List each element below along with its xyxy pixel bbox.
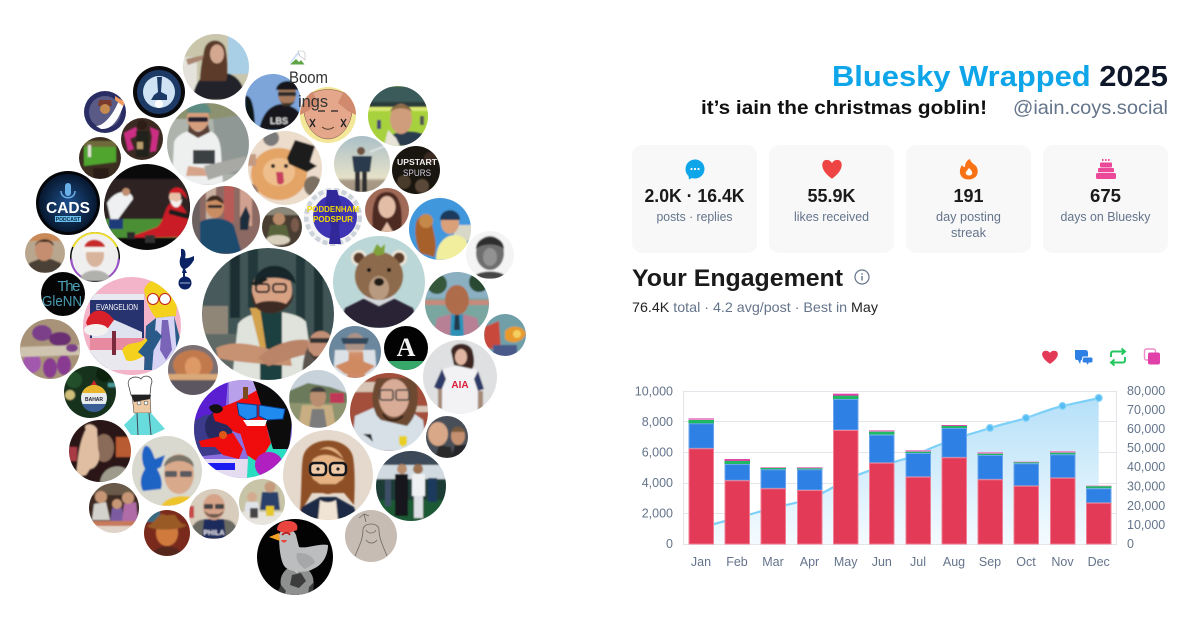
avatar: woman with long dark hair [365, 188, 409, 232]
stat label: likes received [794, 210, 869, 224]
avatar: fisherman [167, 103, 249, 185]
right axis labels: 10,000 [1127, 518, 1165, 532]
icon: heart [822, 160, 842, 179]
month labels: Jun [872, 555, 892, 569]
avatar: hand on face [69, 420, 131, 482]
chart gridlines [683, 391, 1117, 544]
avatar: broken image placeholder with alt text: Boom [289, 69, 328, 87]
avatar: santa hat selfie [70, 232, 120, 282]
bars: pink quotes segments [688, 394, 1112, 487]
avatar: man in cowboy hat [144, 510, 190, 556]
avatar: main large photo of man with cap and beard [202, 248, 334, 380]
right axis labels: 80,000 [1127, 384, 1165, 398]
avatar: bauble ornament: BAHAR [85, 397, 103, 403]
avatar: Poddenham Podspur: PODSPUR [313, 215, 353, 224]
avatar: Upstart Spurs: UPSTART [397, 158, 437, 167]
right axis labels: 20,000 [1127, 499, 1165, 513]
avatar: pomeranian in top hat [248, 131, 322, 205]
heading: Your Engagement: Your Engagement [632, 265, 843, 292]
avatar: Upstart Spurs: SPURS [403, 168, 431, 178]
left axis labels [635, 384, 673, 551]
avatar: Simpsons Evangelion: EVANGELION [96, 303, 138, 312]
avatar: bald man in Philly vest: PHILA [204, 530, 224, 537]
avatar: club badge [133, 66, 185, 118]
avatar: CADS podcast: PODCAST [56, 217, 80, 223]
right axis labels: 40,000 [1127, 460, 1165, 474]
avatar: The Glenn [41, 272, 85, 316]
right axis labels: 50,000 [1127, 441, 1165, 455]
stat value: 55.9K [808, 185, 856, 206]
avatar: pink jacket [121, 118, 163, 160]
avatar: chicken on football [225, 487, 365, 627]
avatar: Upstart Spurs [392, 146, 440, 194]
avatar: black and white portrait [466, 231, 514, 279]
avatar: man holding dog [409, 198, 471, 260]
cumulative line [701, 398, 1099, 528]
stat label: days on Bluesky [1060, 210, 1151, 224]
avatar: broken image placeholder with alt text: ings [298, 93, 328, 111]
month labels: Dec [1088, 555, 1110, 569]
left axis labels: 4,000 [642, 476, 673, 490]
avatar: letter A badge: A [397, 333, 416, 362]
avatar: woman with dark hair [183, 34, 249, 100]
icon: legend reposts arrows [1111, 348, 1125, 366]
avatar: Poddenham Podspur: PODDENHAM [307, 205, 359, 214]
avatar: woman in Ferrari shirt [319, 342, 459, 482]
avatar: colourful mural [484, 314, 526, 356]
avatar: letter A badge [336, 278, 476, 418]
right axis labels: 60,000 [1127, 422, 1165, 436]
stat label: posts · replies [656, 210, 732, 224]
avatar: two men selfie [377, 367, 517, 507]
left axis labels: 8,000 [642, 415, 673, 429]
avatar: man in stadium [368, 86, 428, 146]
month labels: Oct [1016, 555, 1036, 569]
icon: chat bubble [686, 159, 704, 180]
avatar: The Glenn: GleNN [42, 293, 82, 310]
panel: posting streak stat [906, 145, 1031, 253]
avatar: painted portrait [192, 186, 260, 254]
left axis labels: 2,000 [642, 506, 673, 520]
avatar: santa on the pitch [104, 164, 190, 250]
avatar: man with blue cockerel [132, 436, 202, 506]
month labels: Aug [943, 555, 965, 569]
month labels: Mar [762, 555, 784, 569]
month labels: Sep [979, 555, 1001, 569]
right axis labels: 0 [1127, 537, 1134, 551]
avatar: man with food at table [262, 207, 302, 247]
stat label second line: streak [951, 226, 987, 240]
icon: Tottenham cockerel crest [178, 249, 194, 290]
avatar: players in stadium [341, 416, 481, 556]
stat value: 191 [954, 185, 984, 206]
avatar: bear in sweater [333, 236, 425, 328]
subtitle: display name: it’s iain the christmas goblin! [701, 97, 987, 119]
avatar: cartoon chef [124, 376, 165, 435]
bars: blue replies segments [689, 400, 1111, 503]
icon: legend likes heart [1042, 351, 1058, 364]
stat label: day posting [936, 210, 1001, 224]
avatar: CADS podcast: CADS [46, 200, 90, 217]
bars: green reposts segments [688, 396, 1112, 488]
cumulative line points [914, 394, 1102, 458]
chart legend icons [1042, 348, 1160, 366]
month labels: Jan [691, 555, 711, 569]
panel: posts and replies stat [632, 145, 757, 253]
engagement summary text: 76.4K total · 4.2 avg/post · Best in May [632, 299, 878, 315]
avatar: Poddenham Podspur [304, 188, 362, 246]
avatar: pencil sketch [301, 466, 441, 606]
avatar: broken image placeholder with alt text [289, 51, 328, 111]
combined bar and line chart [635, 384, 1165, 569]
panel: days on Bluesky stat [1043, 145, 1168, 253]
avatar: family with merchandise [239, 479, 285, 525]
stat value: 2.0K · 16.4K [644, 185, 745, 206]
month labels: Feb [726, 555, 748, 569]
panel: likes stat [769, 145, 894, 253]
avatar: cartoon red dog with sunglasses [194, 380, 292, 478]
icon: legend replies bubbles [1075, 350, 1093, 366]
right axis labels: 70,000 [1127, 403, 1165, 417]
icon: flame [960, 159, 978, 180]
avatar: The Glenn: The [58, 278, 80, 295]
right axis labels: 30,000 [1127, 480, 1165, 494]
avatar: man in jacket [25, 233, 65, 273]
month labels: May [834, 555, 858, 569]
avatar: woman in Spurs AIA shirt: AIA [451, 380, 469, 391]
avatar: man with cap, dark shirt [245, 74, 301, 130]
avatar: bald man in Philly vest [189, 489, 239, 539]
icon: legend quotes copies [1144, 349, 1160, 364]
avatar: purple flowers [20, 319, 80, 379]
avatar: man at festival [248, 329, 388, 469]
avatar: Simpsons Evangelion [83, 277, 181, 375]
avatar bubble cluster [20, 34, 526, 595]
stat value: 675 [1090, 185, 1121, 206]
avatar: baby cartoon [300, 87, 356, 143]
avatar: person on beach [334, 136, 390, 192]
left axis labels: 10,000 [635, 384, 673, 398]
left axis labels: 0 [666, 537, 673, 551]
avatar: man with cap, dark shirt: LBS [270, 116, 288, 126]
avatar: bauble ornament [64, 366, 116, 418]
month labels: Nov [1051, 555, 1074, 569]
icon: info [855, 270, 869, 284]
avatar: hat badge [84, 91, 126, 133]
avatar: CADS podcast [36, 171, 100, 235]
month labels: Apr [800, 555, 819, 569]
right axis labels [1127, 384, 1165, 551]
bars: red likes segments [689, 430, 1111, 544]
avatar: man in suit with blue shirt [425, 272, 489, 336]
subtitle: handle: @iain.coys.social [1013, 97, 1168, 119]
cumulative area [701, 398, 1099, 544]
title: Bluesky Wrapped 2025 [832, 61, 1168, 93]
avatar: woman in Spurs AIA shirt [390, 307, 530, 447]
avatar: painted lion [168, 345, 218, 395]
avatar: cartoon man with long hair and glasses [258, 405, 398, 545]
stacked bars [688, 394, 1112, 544]
month labels [691, 555, 1110, 569]
month labels: Jul [910, 555, 926, 569]
icon: birthday cake [1096, 159, 1116, 179]
left axis labels: 6,000 [642, 446, 673, 460]
avatar: football on television [79, 137, 121, 179]
avatar: friends at table [89, 483, 139, 533]
avatar: illustrated man with arms crossed [329, 326, 381, 378]
